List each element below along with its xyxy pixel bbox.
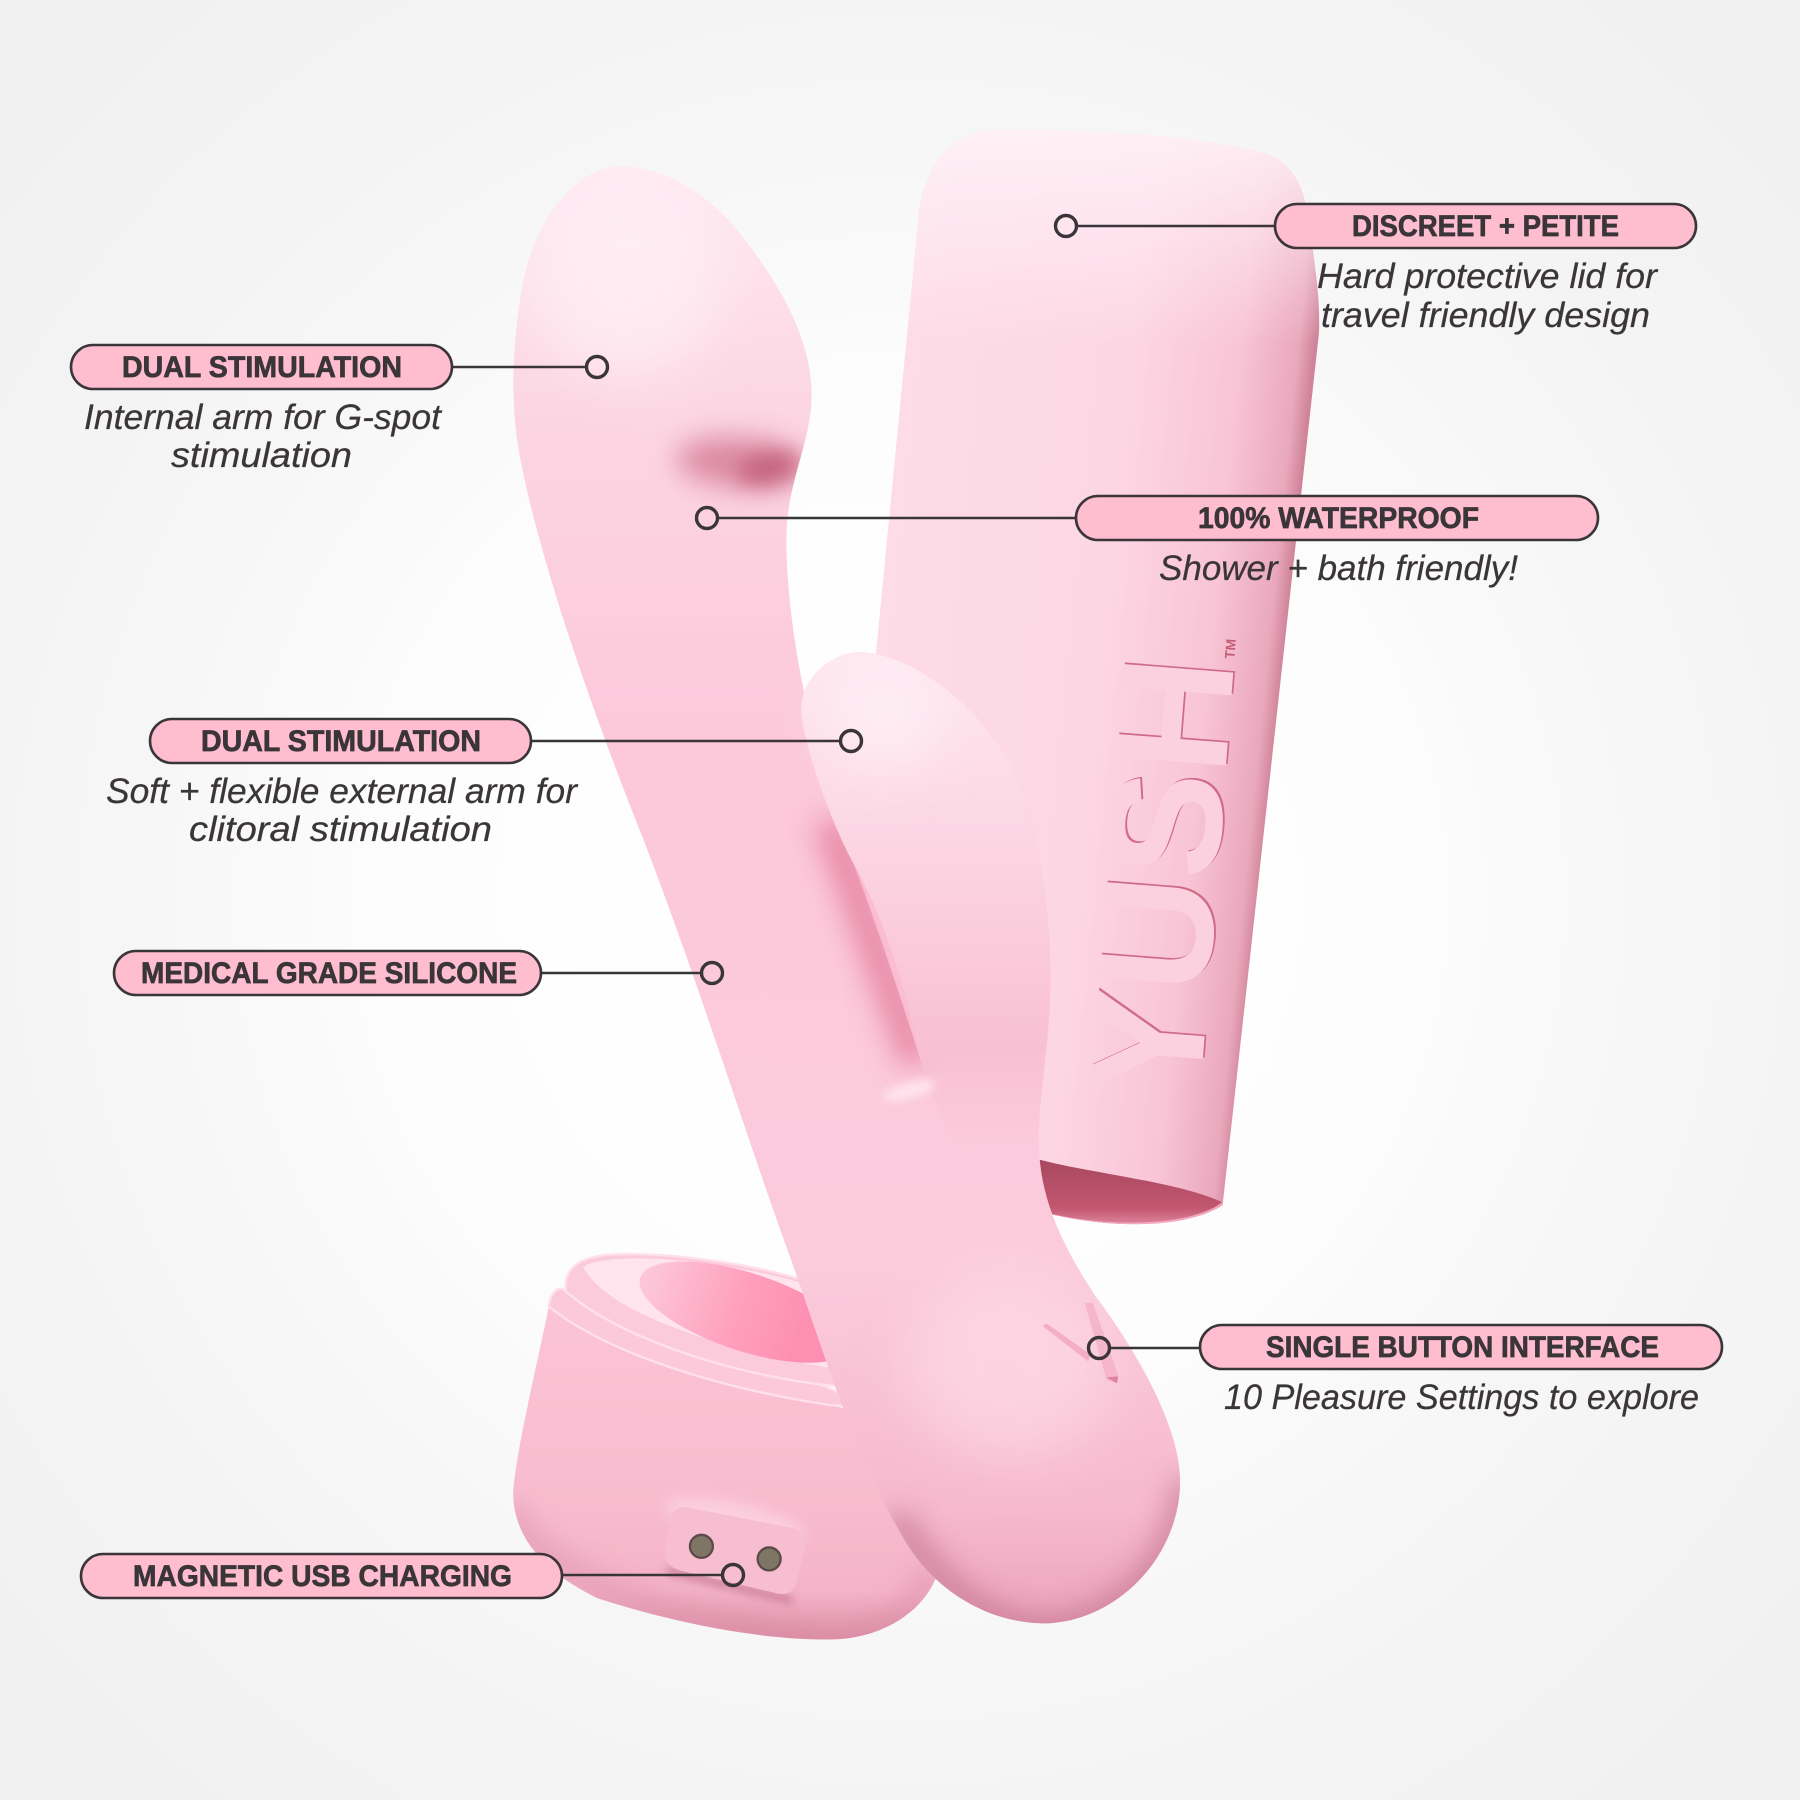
callout: magnetic usb charging xyxy=(81,1554,744,1598)
button ridge xyxy=(1042,1303,1118,1383)
charging pad xyxy=(661,1488,808,1600)
slot between the arms xyxy=(809,746,925,1070)
callout: discreet + petite: Hard protective lid for xyxy=(1317,257,1658,296)
callout: single button interface: SINGLE BUTTON INTERFACE xyxy=(1266,1331,1659,1364)
main device body xyxy=(514,166,1185,1629)
callout: medical grade silicone xyxy=(114,951,722,995)
callout: dual stimulation internal xyxy=(71,345,608,475)
callout: discreet + petite: DISCREET + PETITE xyxy=(1352,210,1619,243)
callout: dual stimulation internal: stimulation xyxy=(171,436,352,475)
base rim rings xyxy=(549,1241,907,1407)
callout: discreet + petite: travel friendly design xyxy=(1321,296,1650,335)
callout: magnetic usb charging: MAGNETIC USB CHARGING xyxy=(133,1560,512,1593)
callout: dual stimulation external: Soft + flexible external arm for xyxy=(106,772,578,811)
product: lid and charging base xyxy=(505,130,1319,1642)
callout: single button interface xyxy=(1088,1325,1722,1417)
callout: single button interface: 10 Pleasure Settings to explore xyxy=(1224,1378,1699,1417)
callout: dual stimulation external xyxy=(106,719,862,849)
callout: waterproof: 100% WATERPROOF xyxy=(1198,502,1479,535)
callout: waterproof xyxy=(696,496,1598,588)
callout: waterproof: Shower + bath friendly! xyxy=(1159,549,1518,588)
callout: medical grade silicone: MEDICAL GRADE SILICONE xyxy=(141,957,517,990)
protective lid xyxy=(876,130,1319,1224)
callout: discreet + petite xyxy=(1056,204,1696,335)
callout: dual stimulation external: clitoral stimulation xyxy=(189,810,492,849)
callout: dual stimulation internal: Internal arm for G-spot xyxy=(84,398,442,437)
embossed logo: YUSH xyxy=(1058,649,1271,1101)
callout: dual stimulation internal: DUAL STIMULATION xyxy=(122,351,402,384)
embossed logo: TM xyxy=(1222,638,1239,659)
embossed logo: YUSH xyxy=(1056,651,1269,1103)
charging base xyxy=(505,1241,936,1642)
callout: dual stimulation external: DUAL STIMULATION xyxy=(201,725,481,758)
